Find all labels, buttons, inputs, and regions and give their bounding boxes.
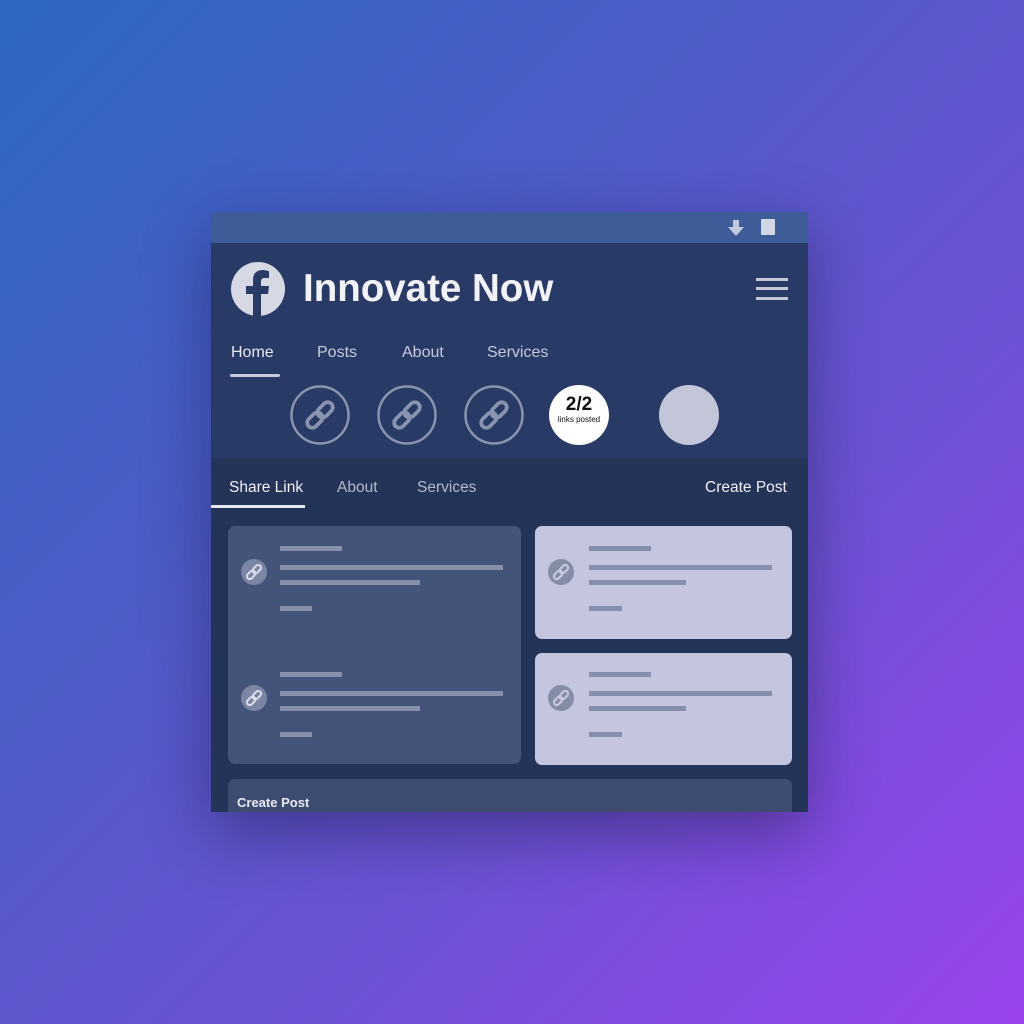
sub tabs: About	[337, 479, 378, 496]
sub tabs: Create Post	[705, 479, 787, 496]
title: Innovate Now	[303, 267, 553, 310]
icon: facebook logo	[231, 262, 285, 316]
progress badge: 2/2	[566, 394, 592, 415]
card: right top	[535, 526, 792, 639]
app window	[211, 212, 808, 812]
nav tabs: About	[402, 344, 444, 361]
top bar	[211, 212, 808, 243]
icon: download arrow	[728, 220, 744, 236]
sub tabs: Services	[417, 479, 476, 496]
icon: square	[761, 219, 775, 235]
card: right bottom	[535, 653, 792, 765]
create post bar: Create Post	[237, 795, 309, 810]
nav tabs: Home	[231, 344, 274, 361]
sub tabs: Share Link	[229, 479, 303, 496]
create post bar	[228, 779, 792, 829]
nav tabs	[230, 344, 548, 377]
icon: hamburger menu	[756, 278, 788, 300]
avatar	[659, 385, 719, 445]
header panel	[211, 243, 808, 458]
sub tabs	[211, 479, 787, 508]
progress badge: links posted	[558, 415, 600, 424]
nav tabs: Posts	[317, 344, 357, 361]
progress badge	[549, 385, 609, 445]
nav tabs: Services	[487, 344, 548, 361]
link circles row	[290, 385, 719, 445]
card: left large	[228, 526, 521, 764]
